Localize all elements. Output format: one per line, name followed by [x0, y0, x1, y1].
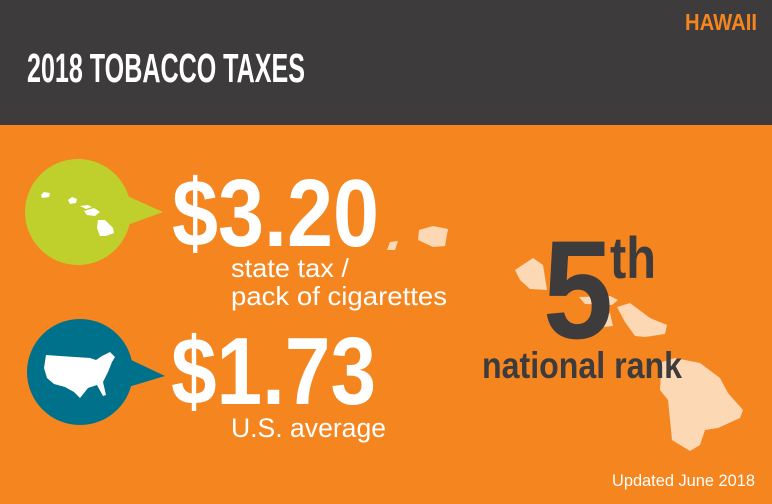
icon: US speech bubble [27, 319, 165, 425]
label: state tax per pack: pack of cigarettes [231, 281, 447, 311]
rank: 5 [543, 211, 613, 368]
label: state tax per pack [231, 253, 447, 311]
value: state tax: $3.20 [172, 160, 379, 267]
icon: hawaii speech bubble [25, 159, 163, 265]
state label: HAWAII [685, 9, 757, 35]
label: US average: U.S. average [231, 413, 386, 443]
footer note: Updated June 2018 [612, 471, 755, 490]
value: US average: $1.73 [171, 318, 376, 425]
label: state tax per pack: state tax / [231, 253, 350, 283]
rank [482, 211, 682, 386]
rank: th [610, 226, 656, 291]
hawaii islands map background [387, 226, 743, 451]
rank: national rank [482, 345, 682, 386]
header band [0, 0, 772, 125]
title: 2018 TOBACCO TAXES [27, 45, 305, 91]
